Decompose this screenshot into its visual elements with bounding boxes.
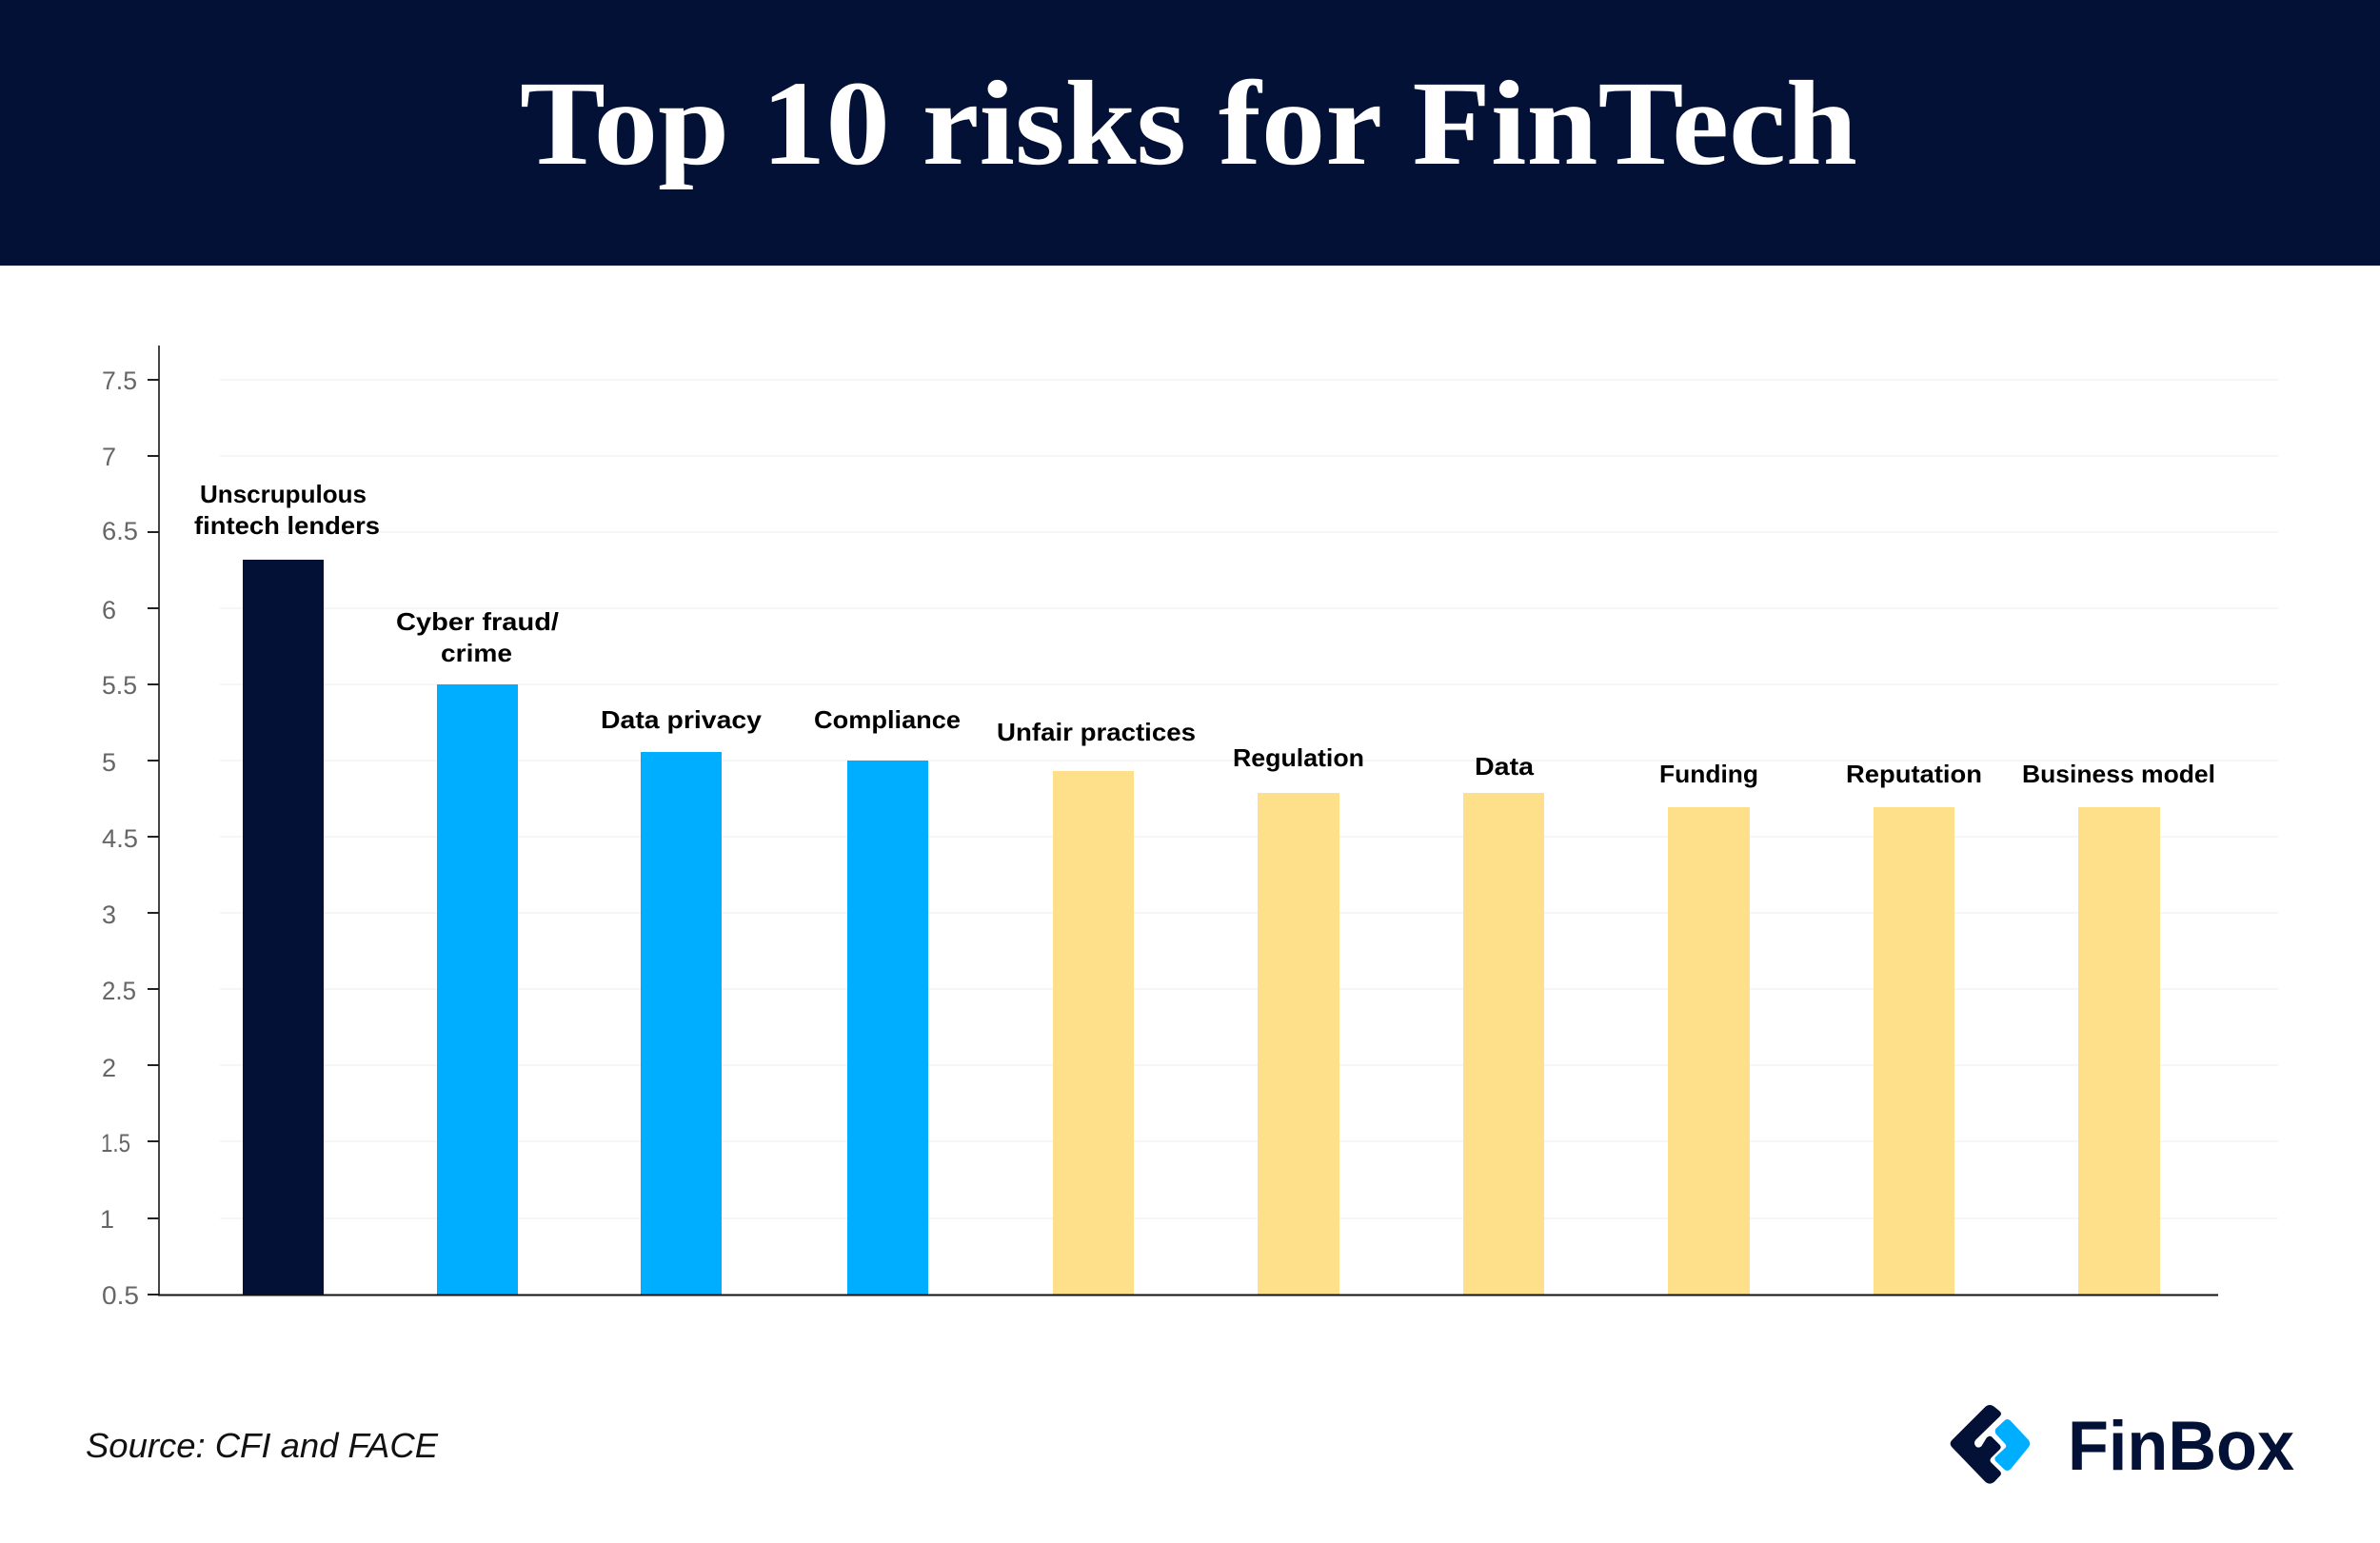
y axis: 6.5 <box>102 517 138 545</box>
y axis: 4.5 <box>102 824 138 853</box>
y axis: 1 <box>100 1205 114 1234</box>
bar: Cyber fraud/crime <box>396 607 559 1295</box>
icon: FinBox mark <box>1951 1405 2030 1484</box>
y axis: 7 <box>102 443 116 471</box>
x axis <box>158 1295 2218 1296</box>
bar: Business model: Business model <box>2022 760 2215 788</box>
bar: Compliance <box>814 705 961 1295</box>
bar: Regulation: Regulation <box>1233 743 1364 772</box>
bar: Data privacy: Data privacy <box>601 705 763 734</box>
bar: Cyber fraud/crime: crime <box>441 639 512 667</box>
bar: Data privacy <box>601 705 763 1295</box>
bar: Regulation <box>1233 743 1364 1295</box>
FinBox logo <box>1951 1405 2294 1485</box>
bar: Funding <box>1659 760 1758 1295</box>
bar: Unscrupulous fintech lenders: Unscrupulous <box>200 480 367 508</box>
y axis: 5 <box>102 748 116 777</box>
y axis: 3 <box>102 900 116 929</box>
bar: Cyber fraud/crime: Cyber fraud/ <box>396 607 559 636</box>
bar: Reputation: Reputation <box>1846 760 1982 788</box>
wordmark: FinBox <box>2068 1408 2294 1485</box>
y axis: 0.5 <box>102 1281 139 1310</box>
bar: Unfair practices <box>997 718 1196 1295</box>
bar: Unscrupulous fintech lenders: fintech lenders <box>194 511 380 540</box>
header band <box>0 0 2380 266</box>
bar: Data <box>1463 752 1544 1295</box>
bar: Unfair practices: Unfair practices <box>997 718 1196 746</box>
bar: Funding: Funding <box>1659 760 1758 788</box>
title: Top 10 risks for FinTech <box>520 57 1857 190</box>
y axis: 1.5 <box>101 1129 130 1157</box>
y axis: 2.5 <box>102 977 136 1005</box>
y axis: 6 <box>102 596 116 624</box>
bar: Unscrupulous fintech lenders <box>194 480 380 1295</box>
y axis: 5.5 <box>102 671 137 700</box>
bar: Data: Data <box>1475 752 1535 781</box>
y axis: 2 <box>102 1054 116 1082</box>
source note: Source: CFI and FACE <box>86 1426 439 1465</box>
y axis: 7.5 <box>102 366 137 395</box>
bar chart <box>100 346 2278 1310</box>
bar: Reputation <box>1846 760 1982 1295</box>
bar: Business model <box>2022 760 2215 1295</box>
y axis <box>100 346 159 1310</box>
bar: Compliance: Compliance <box>814 705 961 734</box>
